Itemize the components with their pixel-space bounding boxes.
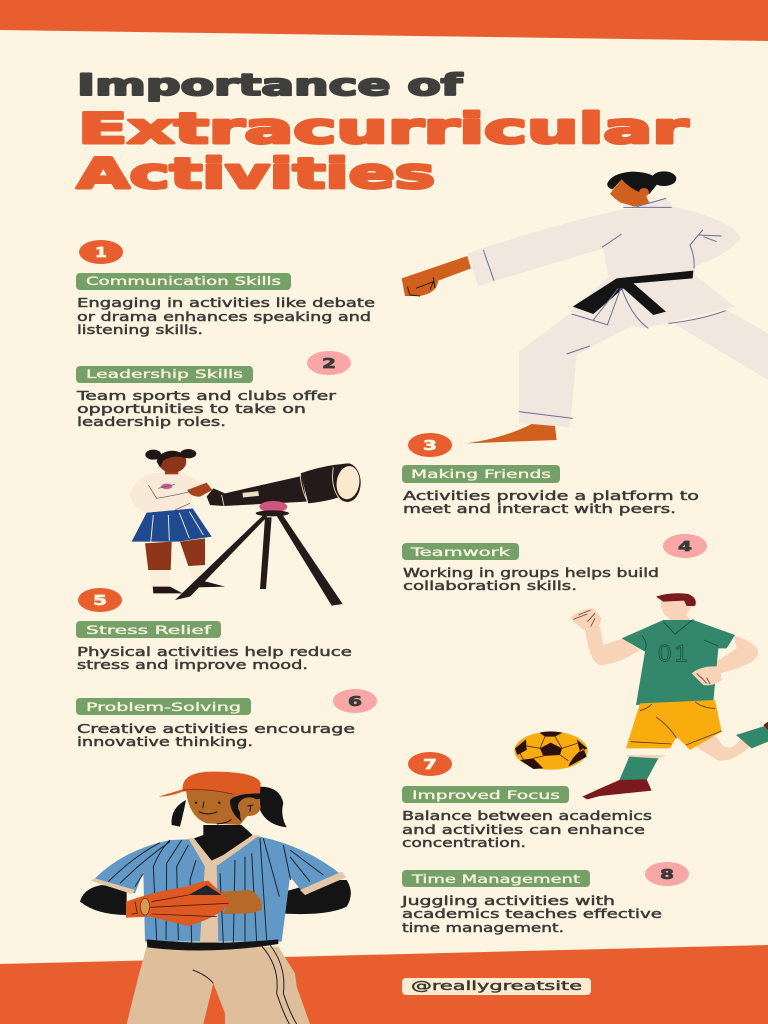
- item 4: teamwork: Working in groups helps build: [403, 566, 659, 580]
- item 6: problem-solving: Creative activities encourage: [77, 722, 355, 736]
- item 7: improved focus: [402, 752, 652, 850]
- item 5: stress relief: [76, 588, 352, 672]
- item 1: communication skills: listening skills.: [77, 323, 203, 337]
- illustration: girl with telescope: [130, 449, 362, 606]
- title: Extracurricular: [78, 104, 688, 153]
- title: Importance of: [77, 68, 463, 102]
- item 8: time management: Juggling activities with: [400, 894, 615, 908]
- item 5: stress relief: stress and improve mood.: [77, 658, 308, 672]
- item 8: time management: academics teaches effective: [402, 907, 662, 921]
- website handle: [402, 978, 591, 995]
- item 2: leadership skills: 2: [322, 357, 336, 372]
- item 2: leadership skills: opportunities to take on: [77, 402, 306, 416]
- item 1: communication skills: or drama enhances speaking and: [77, 310, 371, 324]
- item 1: communication skills: 1: [95, 246, 107, 261]
- item 3: making friends: [402, 433, 699, 516]
- item 7: improved focus: Balance between academics: [402, 809, 652, 823]
- illustration: soccer player: [514, 593, 768, 799]
- item 2: leadership skills: Team sports and clubs offer: [75, 389, 336, 403]
- item 1: communication skills: Engaging in activities like debate: [77, 296, 375, 310]
- website handle: @reallygreatsite: [411, 979, 582, 993]
- item 7: improved focus: 7: [423, 758, 437, 773]
- item 4: teamwork: 4: [678, 540, 692, 555]
- top orange band: [0, 0, 768, 41]
- item 1: communication skills: Communication Skills: [86, 274, 281, 288]
- item 3: making friends: meet and interact with peers.: [403, 502, 676, 516]
- item 4: teamwork: collaboration skills.: [403, 579, 577, 593]
- item 3: making friends: Making Friends: [411, 467, 551, 481]
- item 2: leadership skills: [75, 351, 351, 429]
- item 2: leadership skills: Leadership Skills: [86, 367, 243, 381]
- item 4: teamwork: [402, 534, 707, 593]
- item 8: time management: [400, 862, 689, 935]
- bottom orange band: [0, 945, 768, 1024]
- item 3: making friends: 3: [423, 439, 437, 454]
- title: Activities: [77, 149, 435, 198]
- item 5: stress relief: Physical activities help reduce: [77, 645, 352, 659]
- item 7: improved focus: Improved Focus: [412, 788, 560, 802]
- item 1: communication skills: [76, 240, 375, 337]
- item 6: problem-solving: 6: [348, 695, 362, 710]
- illustration: soccer player: 01: [658, 640, 688, 667]
- illustration: karate figure: [402, 171, 768, 443]
- item 8: time management: Time Management: [410, 872, 581, 886]
- item 6: problem-solving: innovative thinking.: [77, 735, 253, 749]
- item 4: teamwork: Teamwork: [409, 545, 511, 559]
- item 5: stress relief: Stress Relief: [86, 623, 213, 637]
- item 8: time management: 8: [660, 868, 674, 883]
- title: [77, 68, 688, 198]
- item 3: making friends: Activities provide a platform to: [403, 489, 699, 503]
- item 6: problem-solving: [76, 689, 377, 749]
- item 7: improved focus: concentration.: [402, 836, 526, 850]
- item 8: time management: time management.: [402, 921, 564, 935]
- item 5: stress relief: 5: [93, 594, 107, 609]
- illustration: baseball player: [80, 772, 351, 1024]
- item 6: problem-solving: Problem-Solving: [86, 700, 241, 714]
- item 2: leadership skills: leadership roles.: [77, 415, 226, 429]
- item 7: improved focus: and activities can enhance: [402, 823, 645, 837]
